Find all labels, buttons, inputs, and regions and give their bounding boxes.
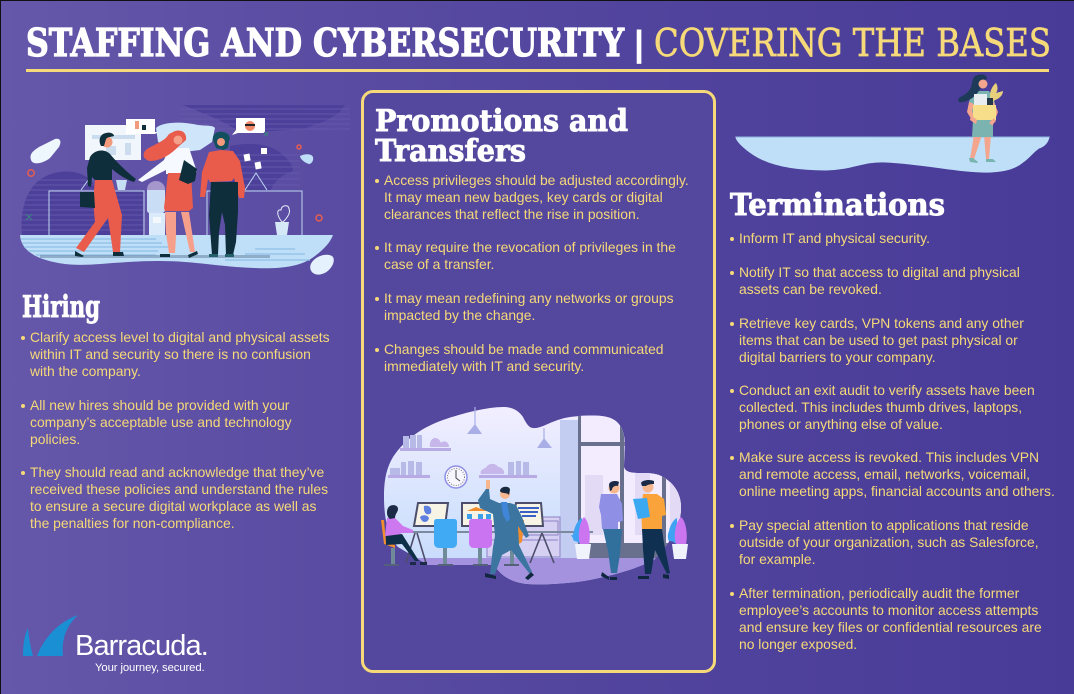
text block: terminations bullets: collected. This includes thumb drives, laptops, xyxy=(739,399,1022,415)
person right xyxy=(200,132,245,257)
text block: hiring bullets: All new hires should be provided with your xyxy=(30,397,289,413)
illustration: departing employee xyxy=(736,74,1050,173)
text block: terminations bullets: Pay special attention to applications that reside xyxy=(739,517,1029,533)
text block: terminations bullets: Make sure access is revoked. This includes VPN xyxy=(739,449,1039,465)
text block: hiring bullets: They should read and acknowledge that they’ve xyxy=(30,464,324,480)
man in suit xyxy=(478,480,534,580)
text block: hiring bullets: company’s acceptable use and technology xyxy=(30,414,292,430)
text block: promotions bullets: Access privileges should be adjusted accordingly. xyxy=(384,172,689,188)
text block: terminations bullets: for example. xyxy=(739,551,815,567)
text block: terminations bullets: phones or anything else of value. xyxy=(739,416,943,432)
text block: promotions bullets: impacted by the change. xyxy=(384,307,535,323)
text block: terminations bullets: Conduct an exit audit to verify assets have been xyxy=(739,382,1035,398)
text block: promotions bullets: It may require the revocation of privileges in the xyxy=(384,239,676,255)
logo: Barracuda xyxy=(23,615,208,674)
text block: terminations bullets: no longer exposed. xyxy=(739,636,857,652)
logo: Barracuda: Your journey, secured. xyxy=(95,662,205,674)
title: STAFFING AND CYBERSECURITY xyxy=(26,20,625,65)
text block: terminations bullets: items that can be used to get past physical or xyxy=(739,332,1018,348)
text block: terminations bullets: and remote access, email, networks, voicemail, xyxy=(739,466,1030,482)
text block: promotions bullets: case of a transfer. xyxy=(384,256,494,272)
text block: terminations bullets: Inform IT and physical security. xyxy=(739,230,930,246)
plants xyxy=(571,517,688,559)
text block: promotions bullets: It may mean new badges, key cards or digital xyxy=(384,189,663,205)
text block: promotions bullets: clearances that reflect the rise in position. xyxy=(384,206,640,222)
text block: terminations bullets: Notify IT so that access to digital and physical xyxy=(739,264,1020,280)
text block: promotions bullets xyxy=(375,172,689,374)
title: | xyxy=(634,23,644,65)
heading: promotions and transfers: Transfers xyxy=(375,134,526,169)
text block: hiring bullets: with the company. xyxy=(30,363,141,379)
water cooler xyxy=(147,181,165,235)
text block: terminations bullets: Retrieve key cards, VPN tokens and any other xyxy=(739,315,1024,331)
text block: hiring bullets: the penalties for non-compliance. xyxy=(30,515,235,531)
illustration: office team xyxy=(381,407,688,584)
text block: terminations bullets: online meeting apps, financial accounts and others. xyxy=(739,483,1055,499)
text block: hiring bullets: policies. xyxy=(30,431,80,447)
text block: terminations bullets: employee’s accounts to monitor access attempts xyxy=(739,602,1038,618)
logo: Barracuda: Barracuda. xyxy=(75,630,208,662)
heading: Hiring: Hiring xyxy=(22,290,100,325)
text block: hiring bullets xyxy=(21,329,330,531)
heading: promotions and transfers: Promotions and xyxy=(375,104,628,139)
text block: hiring bullets: within IT and security so there is no confusion xyxy=(30,346,311,362)
person middle xyxy=(138,131,198,258)
person left xyxy=(75,133,136,257)
text block: promotions bullets: immediately with IT and security. xyxy=(384,358,584,374)
text block: terminations bullets: and ensure key files or confidential resources are xyxy=(739,619,1042,635)
text block: promotions bullets: It may mean redefining any networks or groups xyxy=(384,290,674,306)
text block: terminations bullets: outside of your organization, such as Salesforce, xyxy=(739,534,1039,550)
heading: promotions and transfers xyxy=(374,104,628,169)
text block: hiring bullets: Clarify access level to digital and physical assets xyxy=(30,329,330,345)
illustration: hiring handshake xyxy=(20,105,350,275)
text block: promotions bullets: Changes should be made and communicated xyxy=(384,341,664,357)
text block: hiring bullets: received these policies and understand the rules xyxy=(30,481,328,497)
two colleagues xyxy=(599,480,670,580)
clock xyxy=(445,466,467,488)
text block: terminations bullets: assets can be revoked. xyxy=(739,281,882,297)
text block: terminations bullets xyxy=(730,230,1055,652)
title xyxy=(26,20,1051,72)
panel: promotions and transfers xyxy=(361,90,716,673)
text block: terminations bullets: digital barriers to your company. xyxy=(739,349,936,365)
text block: hiring bullets: to ensure a secure digital workplace as well as xyxy=(30,498,316,514)
text block: terminations bullets: After termination, periodically audit the former xyxy=(739,585,1019,601)
heading: Terminations: Terminations xyxy=(730,188,945,223)
